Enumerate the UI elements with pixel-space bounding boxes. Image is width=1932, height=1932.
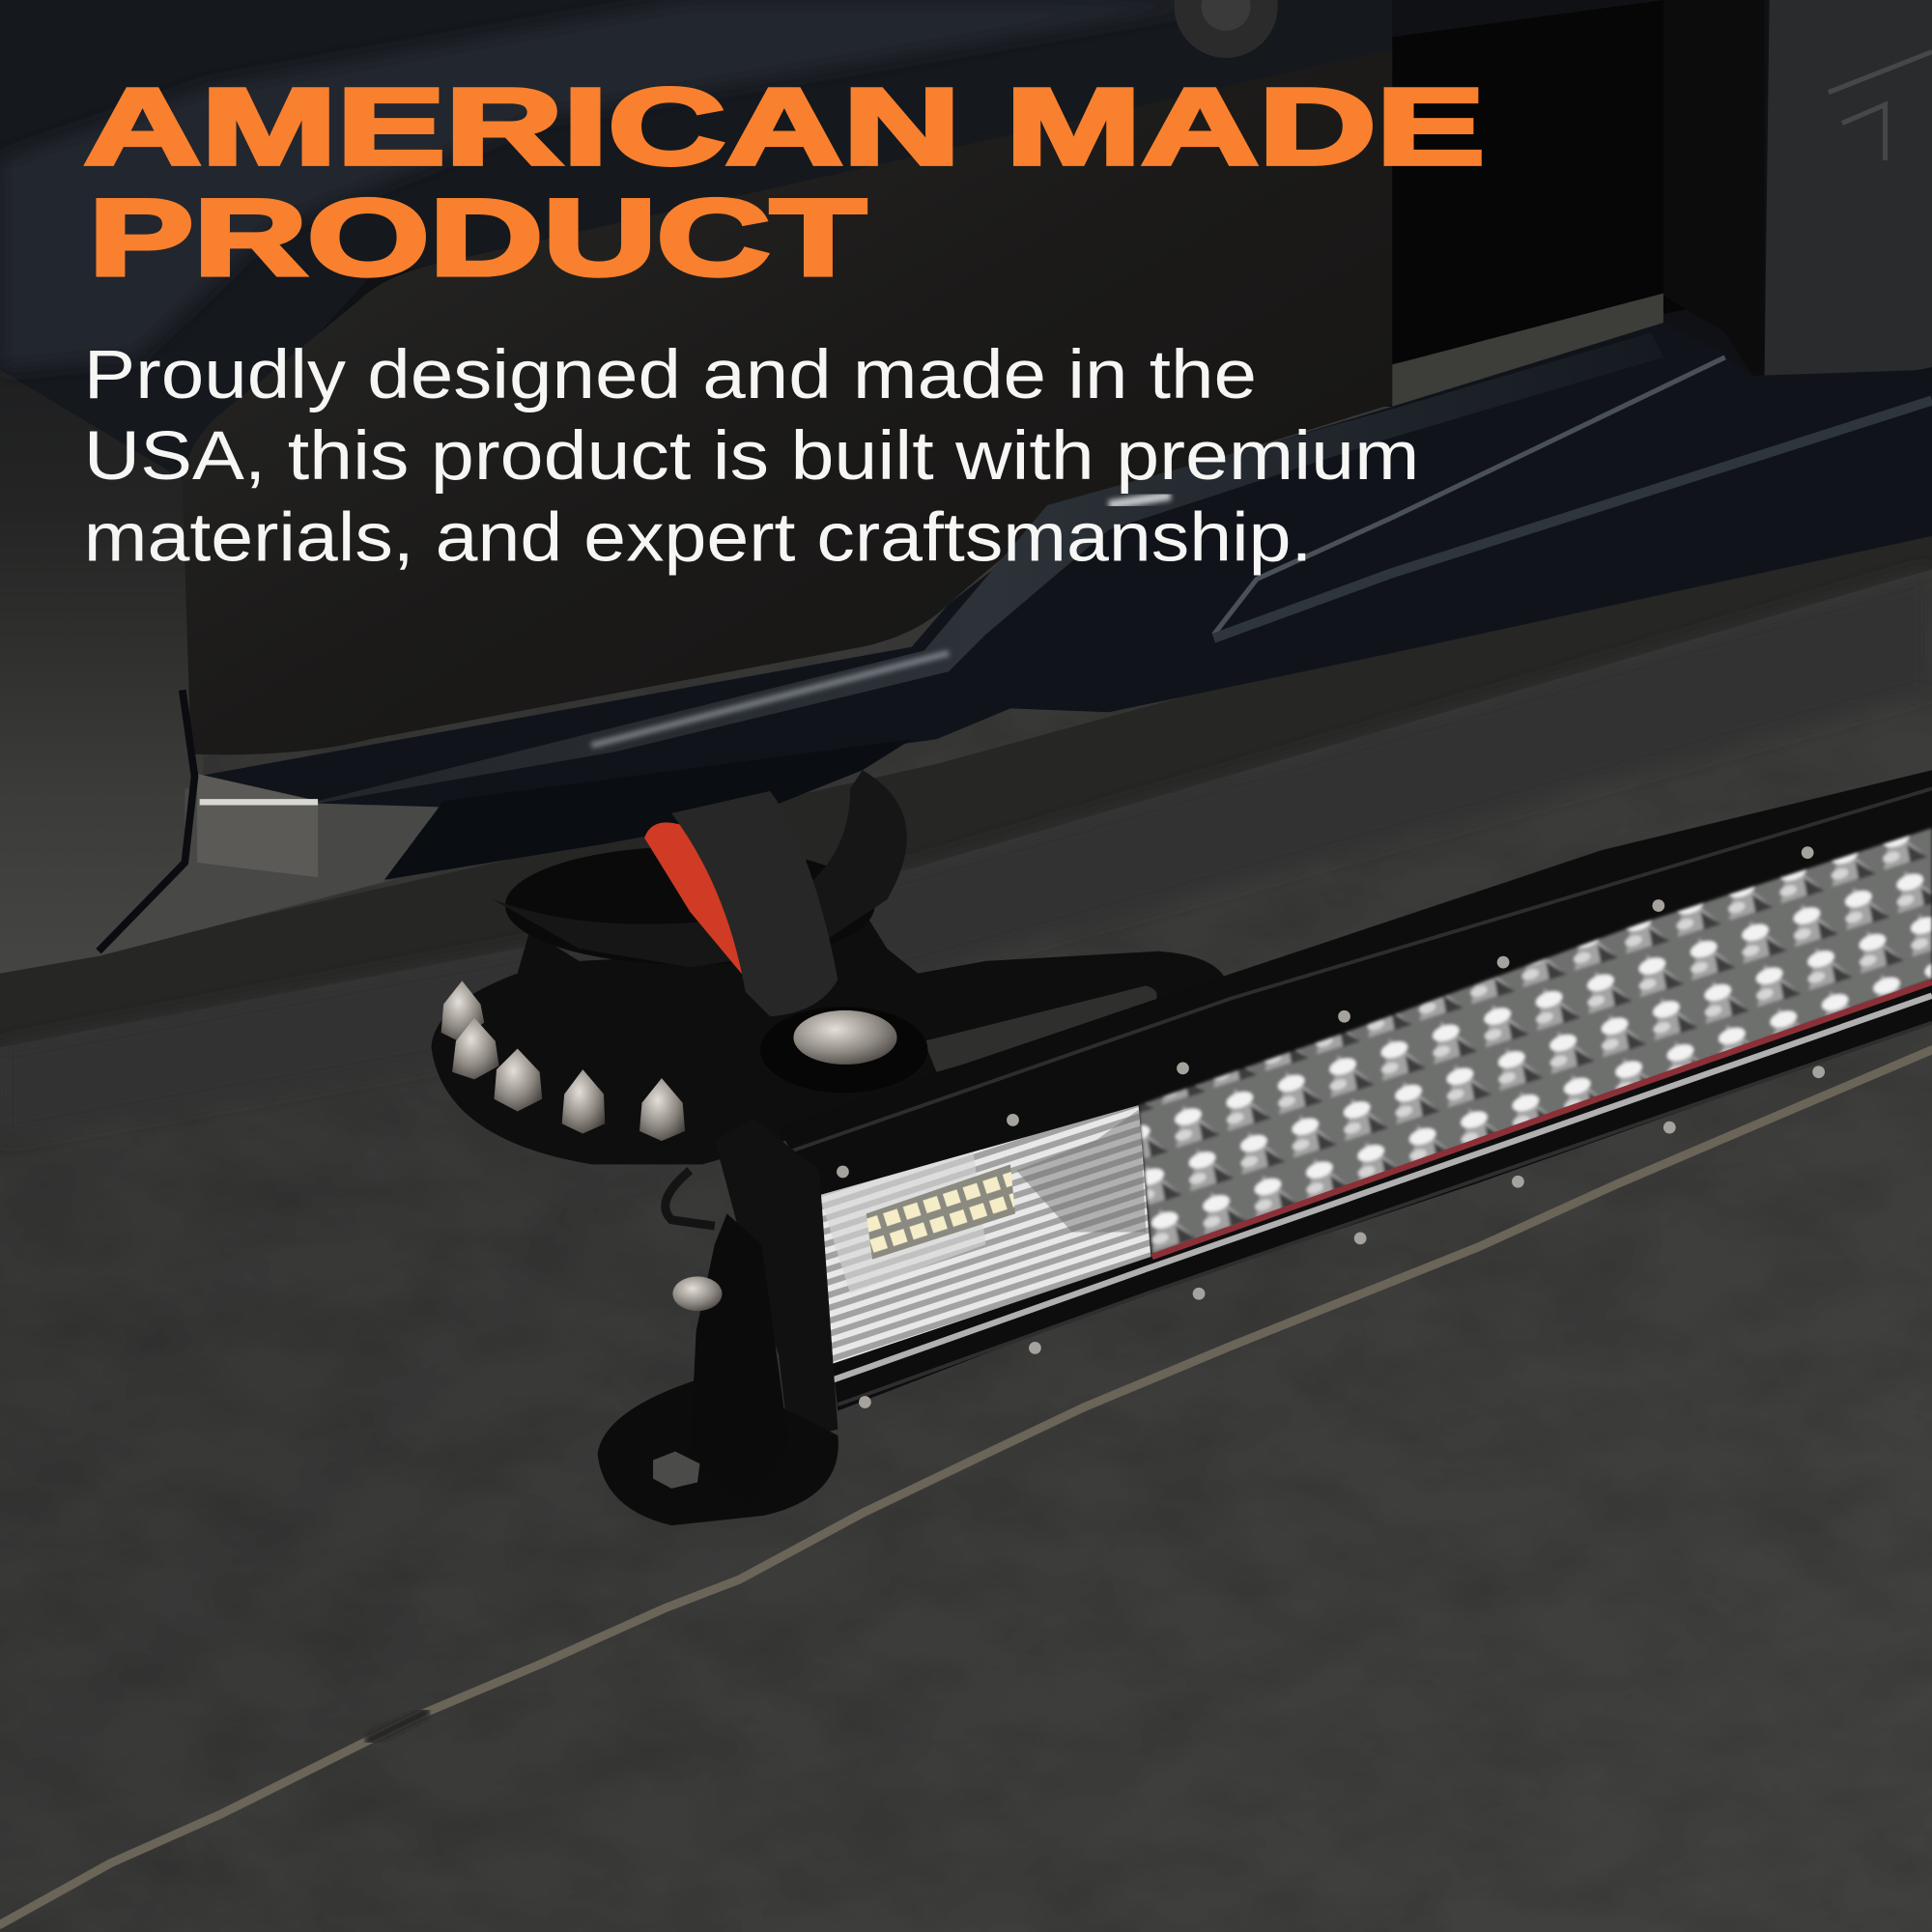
- text block: [84, 66, 1485, 576]
- acorn nuts: [441, 980, 685, 1141]
- silver strip under grille: [1392, 294, 1663, 407]
- mount plate: [431, 909, 1226, 1164]
- dark upper shadow: [0, 0, 1932, 407]
- grille opening: [1392, 0, 1762, 363]
- side knob: [672, 1276, 722, 1311]
- black strap: [671, 791, 838, 1016]
- bar housing: [777, 770, 1932, 1410]
- description: [84, 336, 1419, 576]
- grey sill: [99, 788, 443, 956]
- bright corner trim: [197, 774, 318, 877]
- hitch shackle: [505, 846, 875, 965]
- foot hex bolt: [653, 1452, 699, 1489]
- recovery mount: [384, 739, 1226, 1164]
- description: Proudly designed and made in the: [84, 336, 1257, 413]
- description: USA, this product is built with premium: [84, 417, 1419, 495]
- bar screws: [837, 846, 1825, 1408]
- red strap: [644, 822, 752, 985]
- reverse LED chips: [867, 1164, 1015, 1260]
- vehicle body and bumper: [0, 0, 1932, 974]
- parking sensor: [1175, 0, 1278, 58]
- title: AMERICAN MADE: [84, 66, 1485, 187]
- dome bolt: [760, 1007, 927, 1093]
- bumper lip: [384, 739, 912, 880]
- textured black panel: [183, 49, 1392, 754]
- licence plate panel: [1765, 0, 1932, 397]
- title: PRODUCT: [89, 176, 867, 298]
- title: [84, 66, 1485, 298]
- side bracket: [690, 1213, 788, 1506]
- upper chrome surround: [0, 0, 1392, 480]
- floor mount foot: [598, 1380, 838, 1525]
- flood lens: [819, 1105, 1151, 1365]
- end cap: [715, 1119, 838, 1441]
- cable loop: [666, 1171, 715, 1226]
- left body panel: [0, 124, 394, 974]
- spot lens: [1139, 828, 1932, 1257]
- square bracket block: [1658, 394, 1786, 446]
- LED light bar: [598, 770, 1932, 1525]
- chrome highlights: [591, 653, 949, 746]
- lower chrome strip: [197, 323, 1932, 807]
- description: materials, and expert craftsmanship.: [84, 498, 1312, 576]
- mount slot: [924, 985, 1157, 1072]
- dark bracket: [1663, 0, 1765, 394]
- floor crack: [0, 1050, 1932, 1924]
